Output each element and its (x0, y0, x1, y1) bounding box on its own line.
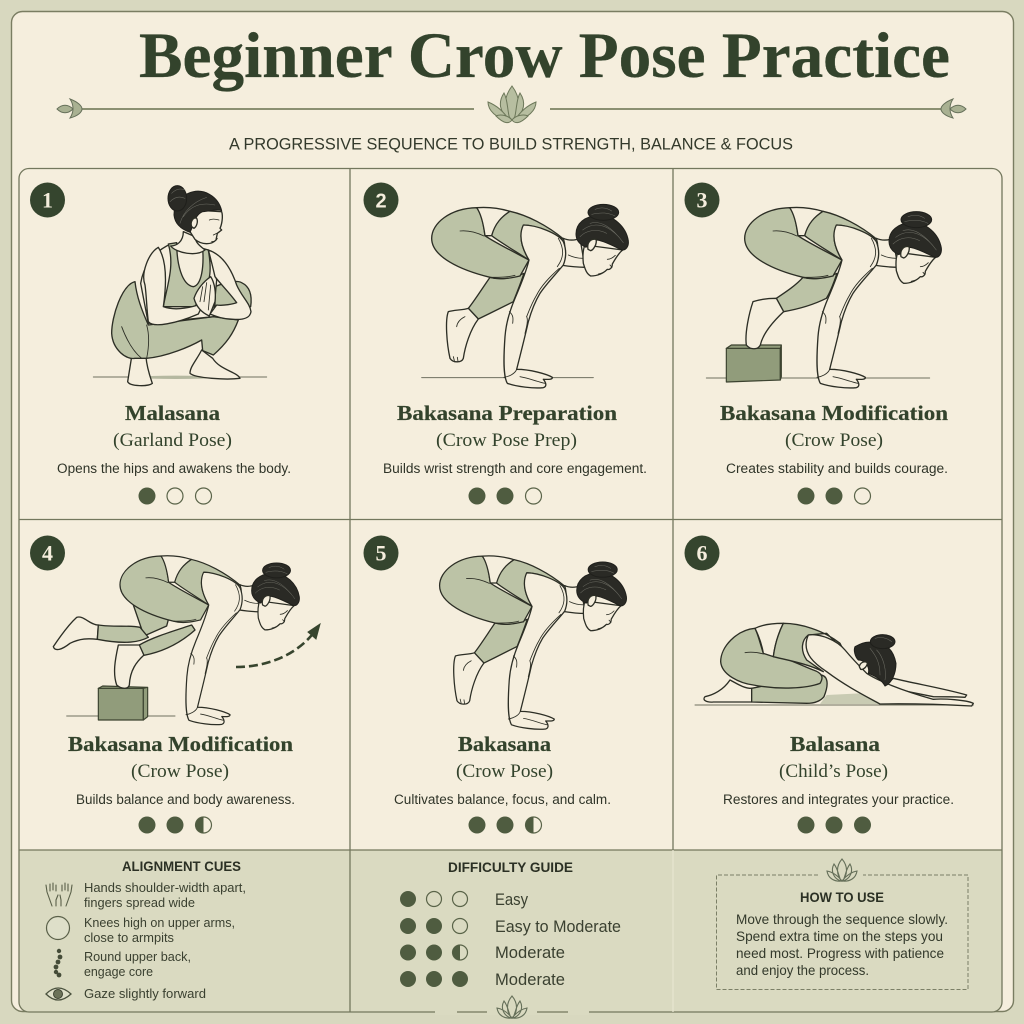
panel: step 3 Bakasana Modification (684, 182, 948, 504)
icon: small lotus (827, 859, 857, 881)
ornament divider with lotus (57, 86, 966, 123)
heading: Bakasana Modification (68, 732, 293, 756)
heading: Bakasana (458, 732, 552, 756)
cue text: knees: close to armpits (84, 930, 174, 945)
step number 3 (684, 182, 720, 218)
step number 4 (30, 536, 65, 570)
row: moderate half: Moderate (495, 944, 565, 962)
cue text: knees: Knees high on upper arms, (84, 915, 235, 930)
step number 3: 3 (696, 188, 708, 212)
step number 6 (684, 536, 720, 570)
heading: Bakasana Preparation (397, 401, 617, 425)
panel: step 1 Malasana (30, 182, 291, 504)
panel: step 5 Bakasana (364, 536, 627, 834)
sanskrit subtitle: (Crow Pose) (785, 431, 883, 451)
cue text: back (84, 949, 191, 979)
heading: ALIGNMENT CUES (122, 859, 241, 874)
description: Creates stability and builds courage. (726, 461, 948, 476)
step number 1 (30, 182, 65, 218)
panel: step 4 Bakasana Modification (30, 536, 320, 834)
row: moderate full: Moderate (495, 971, 565, 989)
description: Opens the hips and awakens the body. (57, 461, 291, 476)
bottom ornament (435, 996, 589, 1018)
sanskrit subtitle: (Child’s Pose) (779, 762, 888, 782)
sanskrit subtitle: (Garland Pose) (113, 431, 232, 451)
description: Builds balance and body awareness. (76, 792, 295, 807)
panel: step 6 Balasana (684, 536, 973, 834)
icon: spine (54, 949, 62, 977)
row: moderate half (400, 944, 565, 962)
panel: how to use (716, 859, 968, 990)
cue text: back: Round upper back, (84, 949, 191, 964)
description: Builds wrist strength and core engagement. (383, 461, 647, 476)
panel: alignment cues (46, 859, 246, 1001)
sanskrit subtitle: (Crow Pose) (456, 762, 553, 782)
description: Cultivates balance, focus, and calm. (394, 792, 611, 807)
heading: Balasana (790, 732, 881, 756)
difficulty dots (138, 816, 212, 834)
icon: left leaf (57, 99, 82, 118)
step number 4: 4 (42, 540, 53, 566)
difficulty dots (468, 816, 542, 834)
sanskrit subtitle: (Crow Pose Prep) (436, 431, 577, 451)
subtitle: A PROGRESSIVE SEQUENCE TO BUILD STRENGTH, BALANCE & FOCUS (229, 136, 793, 154)
cue text: gaze: Gaze slightly forward (84, 986, 206, 1001)
heading: DIFFICULTY GUIDE (448, 860, 573, 875)
heading: Bakasana Modification (720, 401, 948, 425)
illustration: garland pose (93, 186, 267, 386)
body text: Move through the sequence slowly. (736, 911, 948, 927)
row: easy: Easy (495, 891, 529, 909)
step number 5: 5 (376, 540, 386, 566)
sanskrit subtitle: (Crow Pose) (131, 762, 229, 782)
illustration: crow pose (440, 556, 627, 729)
step number 5 (364, 536, 398, 570)
dashed box (716, 875, 968, 990)
illustration: crow with extended leg (53, 556, 299, 725)
row: easy (400, 891, 529, 909)
body text: need most. Progress with patience (736, 945, 944, 961)
step number 2: 2 (375, 190, 387, 212)
illustration: crow with foot on block (706, 207, 941, 388)
cue text: hands: fingers spread wide (84, 895, 195, 910)
body text (736, 911, 948, 978)
difficulty dots (138, 488, 212, 504)
row: moderate full (400, 971, 565, 989)
difficulty dots (798, 488, 870, 504)
difficulty dots (468, 488, 542, 504)
step number 2 (364, 182, 398, 218)
title: Beginner Crow Pose Practice (139, 20, 950, 92)
icon: eye (46, 988, 71, 1000)
icon: right leaf (941, 99, 966, 118)
cue text: hands (84, 880, 246, 910)
cue text: knees (84, 915, 235, 945)
panel: step 2 Bakasana Preparation (364, 182, 647, 504)
row: easy to moderate (400, 918, 621, 936)
arrow: dashed lift arrow (236, 624, 320, 667)
heading: HOW TO USE (800, 890, 884, 905)
heading: Malasana (125, 401, 221, 425)
illustration: child's pose (695, 623, 973, 706)
icon: lotus header (488, 86, 536, 123)
step number 6: 6 (696, 540, 708, 566)
panel: difficulty guide (400, 860, 621, 989)
body text: Spend extra time on the steps you (736, 928, 943, 944)
icon: hands (46, 883, 72, 906)
step number 1: 1 (42, 188, 53, 212)
illustration: crow prep (422, 204, 628, 388)
difficulty dots (798, 816, 871, 834)
grid frame (19, 168, 1002, 1012)
description: Restores and integrates your practice. (723, 792, 954, 807)
body text: and enjoy the process. (736, 962, 869, 978)
icon: knee circle (46, 916, 70, 940)
cue text: hands: Hands shoulder-width apart, (84, 880, 246, 895)
row: easy to moderate: Easy to Moderate (495, 918, 621, 936)
cue text: back: engage core (84, 964, 153, 979)
bottom information band (19, 850, 1002, 1012)
